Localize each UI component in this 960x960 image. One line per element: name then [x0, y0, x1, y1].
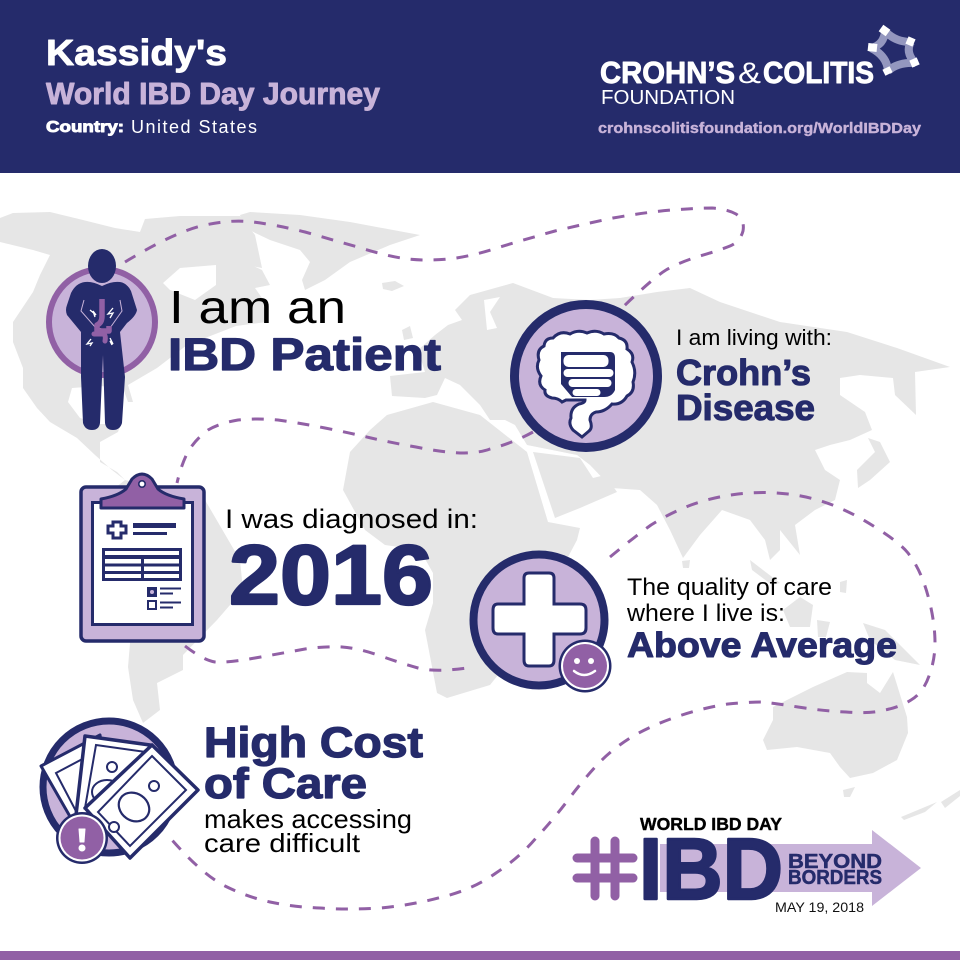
logo: Crohn's & Colitis Foundation — [600, 28, 916, 109]
text: I am an IBD Patient: I am an — [169, 281, 346, 333]
title: name: Kassidy's — [46, 32, 227, 73]
website url: crohnscolitisfoundation.org/WorldIBDDay — [598, 120, 922, 137]
beyond borders: BEYOND — [788, 851, 882, 873]
subtitle: World IBD Day Journey — [46, 76, 381, 111]
text: High Cost of Care: care difficult — [204, 828, 361, 858]
text: diagnosed in 2016: 2016 — [229, 528, 433, 622]
hash sign — [577, 841, 633, 896]
logo star mark — [868, 28, 916, 74]
text: quality of care: Above Average — [627, 626, 897, 665]
text: I am an IBD Patient: IBD Patient — [168, 329, 441, 380]
text: High Cost of Care: makes accessing — [204, 804, 412, 834]
text: diagnosed in 2016 — [225, 504, 478, 622]
icon: intestine in circle — [514, 304, 658, 448]
logo: Crohn's & Colitis Foundation: CROHN’S — [600, 55, 735, 90]
world map background — [0, 212, 960, 820]
text: diagnosed in 2016: I was diagnosed in: — [225, 504, 478, 534]
text: quality of care — [626, 574, 897, 665]
logo: Crohn's & Colitis Foundation: FOUNDATION — [601, 87, 735, 109]
text: living with Crohn's Disease: Crohn’s — [676, 352, 811, 393]
text: living with Crohn's Disease: Disease — [676, 387, 815, 428]
country value: United States — [131, 117, 257, 137]
IBD letters: IBD — [639, 821, 783, 918]
text: High Cost of Care — [204, 719, 423, 858]
country label: Country: — [46, 119, 124, 136]
dashed journey route — [125, 208, 935, 909]
icon: person holding stomach — [49, 249, 155, 430]
arrow — [660, 830, 921, 906]
footer bar — [0, 951, 960, 960]
text: High Cost of Care: of Care — [204, 760, 367, 808]
date: MAY 19, 2018 — [775, 899, 864, 915]
text: I am an IBD Patient — [168, 281, 441, 380]
logo: Crohn's & Colitis Foundation: & — [738, 57, 761, 90]
text: living with Crohn's Disease — [676, 325, 832, 428]
heading: world ibd day: WORLD IBD DAY — [640, 814, 782, 834]
icon: medical cross with smile — [474, 554, 612, 692]
logo: World IBD Day Beyond Borders — [577, 814, 921, 918]
icon: clipboard — [81, 474, 204, 641]
text: living with Crohn's Disease: I am living with: — [676, 325, 832, 350]
text: quality of care: where I live is: — [626, 600, 785, 627]
header banner — [0, 0, 960, 173]
logo: Crohn's & Colitis Foundation: COLITIS — [763, 55, 874, 90]
text: High Cost of Care: High Cost — [204, 719, 423, 767]
icon: money with alert — [41, 721, 198, 864]
text: quality of care: The quality of care — [627, 574, 832, 601]
logo: World IBD Day Beyond Borders: BORDERS — [788, 867, 882, 889]
